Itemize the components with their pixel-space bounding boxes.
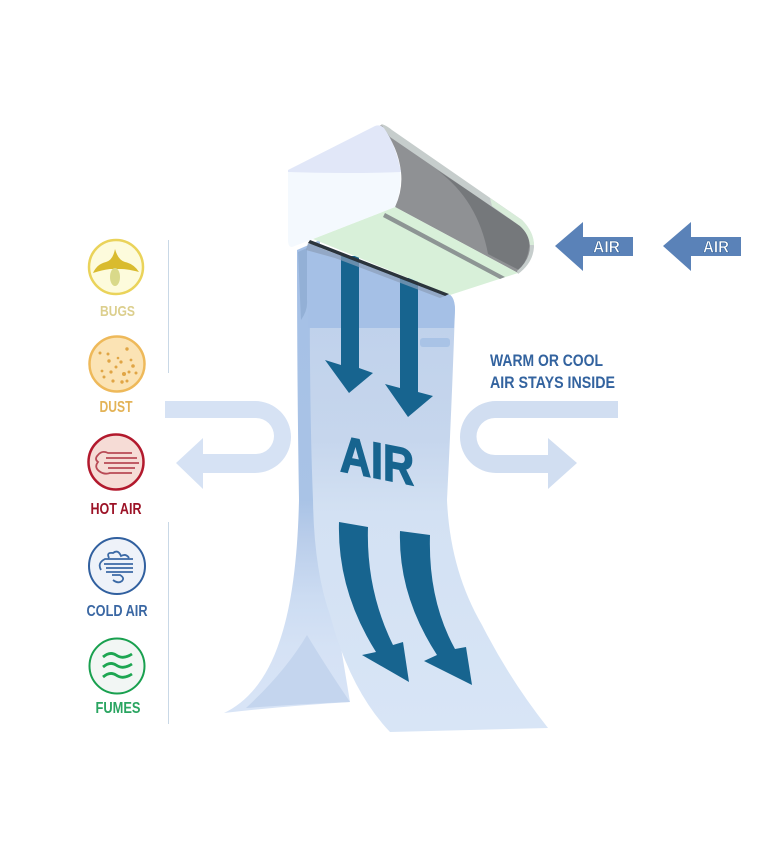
icon: dust	[90, 336, 144, 392]
text: warm or cool air stays inside: AIR STAYS INSIDE	[490, 374, 615, 392]
air curtain unit	[288, 124, 534, 298]
unit dark face shade	[437, 170, 529, 270]
arrow: air intake right	[663, 222, 741, 271]
unit stripe	[383, 213, 505, 279]
label: bugs: BUGS	[100, 303, 135, 320]
unit end cap top	[288, 125, 401, 173]
label: fumes: FUMES	[96, 700, 141, 717]
unit top rim	[381, 124, 534, 274]
arrow label: AIR	[593, 238, 620, 256]
unit rim green tint	[490, 198, 534, 245]
label: cold air: COLD AIR	[86, 603, 148, 620]
curtain upper shade	[308, 244, 455, 328]
curtain left fold shadow	[298, 248, 307, 320]
text: warm or cool air stays inside: WARM OR COOL	[490, 352, 603, 370]
curtain inner notch	[246, 635, 350, 708]
curtain mid band	[420, 338, 450, 347]
icon: cold air	[89, 538, 145, 594]
icon: hot air	[88, 434, 144, 490]
icon: fumes	[90, 638, 144, 694]
arrow: lower right curved	[400, 531, 472, 685]
unit slot shadow	[306, 243, 445, 298]
icon: bugs	[89, 240, 143, 294]
label: dust: DUST	[100, 399, 133, 416]
unit dark slot	[308, 240, 449, 296]
curtain front panel	[310, 245, 548, 732]
arrow: upper left down	[325, 256, 373, 393]
text: air on curtain: AIR	[340, 424, 414, 496]
arrow: air intake left	[555, 222, 633, 271]
arrow: lower left curved	[339, 522, 409, 682]
arrow: upper right down	[385, 278, 433, 417]
arrow: left u-turn	[165, 401, 291, 489]
label: hot air: HOT AIR	[90, 501, 142, 518]
unit end cap lower	[288, 170, 400, 247]
left divider lines	[168, 240, 170, 724]
air curtain	[224, 240, 548, 732]
curtain back fold	[224, 240, 350, 713]
text: warm or cool air stays inside	[490, 352, 615, 392]
unit green underside	[313, 207, 518, 295]
arrow label: AIR	[703, 238, 729, 256]
arrow: right u-turn	[460, 401, 618, 489]
unit grey face	[380, 125, 533, 273]
